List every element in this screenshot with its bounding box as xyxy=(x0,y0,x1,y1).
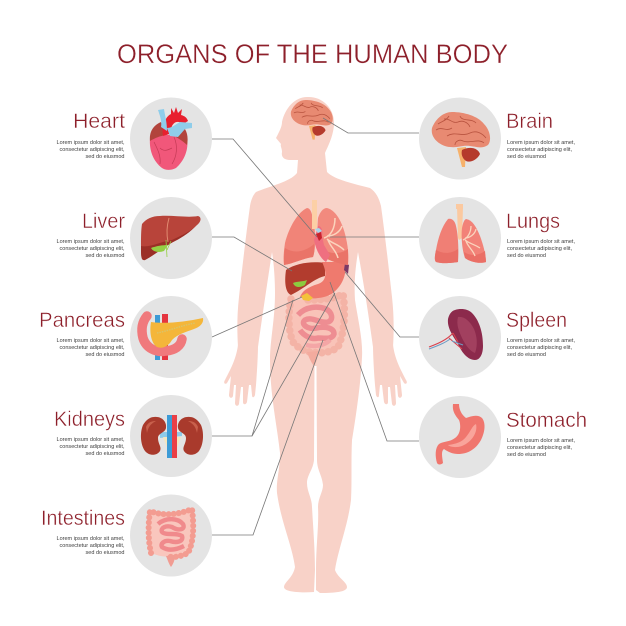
body heart xyxy=(314,226,330,262)
heading: Heart: Heart xyxy=(73,110,125,133)
text block xyxy=(56,437,125,457)
text block: consectetur adipiscing elit, xyxy=(60,444,125,450)
icon: kidneys xyxy=(141,415,203,458)
icon: liver xyxy=(141,216,201,260)
text block: Lorem ipsum dolor sit amet, xyxy=(507,438,575,444)
heading: Pancreas: Pancreas xyxy=(39,309,125,332)
heading: Lungs: Lungs xyxy=(506,210,560,233)
body liver xyxy=(285,262,325,295)
panel: spleen xyxy=(419,296,575,378)
text block: Lorem ipsum dolor sit amet, xyxy=(56,239,125,245)
panel: brain xyxy=(419,98,575,180)
text block: sed do eiusmod xyxy=(507,352,546,358)
text block: consectetur adipiscing elit, xyxy=(507,246,572,252)
body brain xyxy=(291,100,333,140)
text block xyxy=(56,239,125,259)
text block xyxy=(507,338,575,358)
text block: consectetur adipiscing elit, xyxy=(60,345,125,351)
icon: intestines xyxy=(149,508,193,567)
text block xyxy=(56,536,125,556)
text block: sed do eiusmod xyxy=(86,154,124,160)
heading: Kidneys: Kidneys xyxy=(54,408,125,431)
text block: Lorem ipsum dolor sit amet, xyxy=(507,140,575,146)
text block xyxy=(507,438,575,458)
right hand xyxy=(373,345,407,406)
panel: heart xyxy=(56,98,212,180)
heading: Stomach: Stomach xyxy=(506,409,587,432)
text block: sed do eiusmod xyxy=(507,253,546,259)
heading: Intestines: Intestines xyxy=(41,507,125,530)
text block: consectetur adipiscing elit, xyxy=(507,147,572,153)
text block: consectetur adipiscing elit, xyxy=(60,246,125,252)
text block xyxy=(56,338,125,358)
panel: liver xyxy=(56,197,212,279)
text block: sed do eiusmod xyxy=(507,154,546,160)
text block: Lorem ipsum dolor sit amet, xyxy=(56,140,125,146)
text block xyxy=(507,140,575,160)
panel: stomach xyxy=(419,396,587,478)
text block: consectetur adipiscing elit, xyxy=(507,345,572,351)
text block: Lorem ipsum dolor sit amet, xyxy=(507,239,575,245)
icon: stomach xyxy=(436,404,485,464)
title: ORGANS OF THE HUMAN BODY xyxy=(117,39,508,69)
text block: sed do eiusmod xyxy=(86,451,124,457)
left hand xyxy=(224,345,258,406)
text block: Lorem ipsum dolor sit amet, xyxy=(56,338,125,344)
icon: pancreas xyxy=(142,314,203,360)
body trachea xyxy=(312,200,317,229)
text block: Lorem ipsum dolor sit amet, xyxy=(56,437,125,443)
text block: sed do eiusmod xyxy=(86,550,124,556)
text block xyxy=(56,140,125,160)
body spleen xyxy=(344,263,349,274)
panel: pancreas xyxy=(39,296,212,378)
body intestines xyxy=(288,294,344,366)
text block: consectetur adipiscing elit, xyxy=(507,445,572,451)
text block: consectetur adipiscing elit, xyxy=(60,543,125,549)
icon: heart xyxy=(150,107,192,170)
panel: lungs xyxy=(419,197,575,279)
body lungs xyxy=(284,208,348,265)
body gallbladder xyxy=(293,280,307,287)
text block: Lorem ipsum dolor sit amet, xyxy=(56,536,125,542)
human body silhouette xyxy=(224,97,407,593)
heading: Brain: Brain xyxy=(506,110,553,133)
internal organs on body xyxy=(284,100,349,366)
icon: spleen xyxy=(429,309,483,360)
text block xyxy=(507,239,575,259)
heading: Spleen: Spleen xyxy=(506,309,567,332)
body stomach xyxy=(300,262,346,298)
text block: sed do eiusmod xyxy=(86,253,124,259)
leader lines xyxy=(212,118,419,535)
icon: brain xyxy=(432,112,490,167)
icon: lungs xyxy=(435,204,486,263)
text block: Lorem ipsum dolor sit amet, xyxy=(507,338,575,344)
text block: sed do eiusmod xyxy=(507,452,546,458)
text block: consectetur adipiscing elit, xyxy=(60,147,125,153)
heading: Liver: Liver xyxy=(82,210,125,233)
panel: intestines xyxy=(41,494,212,576)
body pancreas xyxy=(301,293,313,301)
text block: sed do eiusmod xyxy=(86,352,124,358)
panel: kidneys xyxy=(54,395,212,477)
